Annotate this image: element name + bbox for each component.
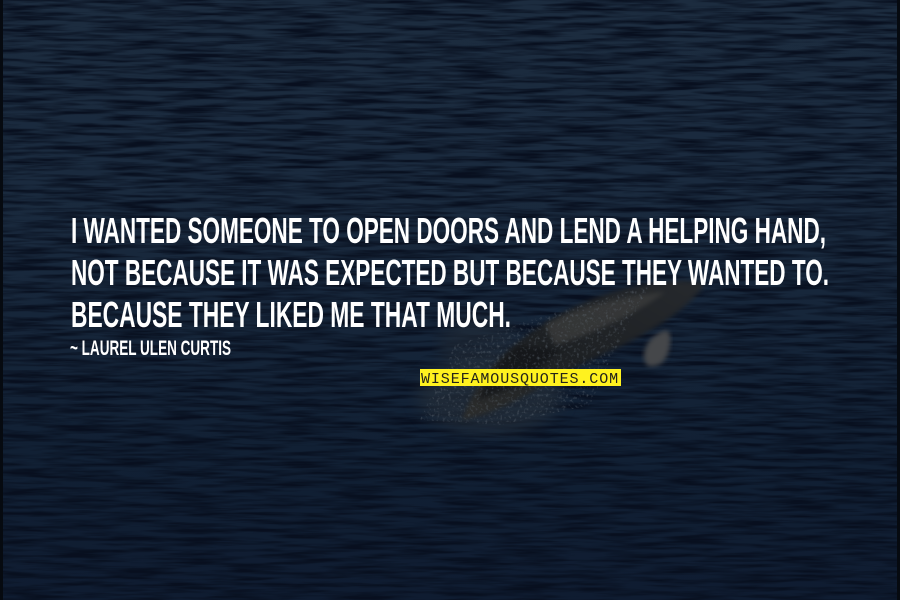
quote text [71,210,829,335]
watermark badge: WISEFAMOUSQUOTES.COM [421,371,618,388]
dolphin and splash [418,281,705,433]
attribution: ~ LAUREL ULEN CURTIS [70,337,231,360]
quote text: BECAUSE THEY LIKED ME THAT MUCH. [71,294,511,335]
